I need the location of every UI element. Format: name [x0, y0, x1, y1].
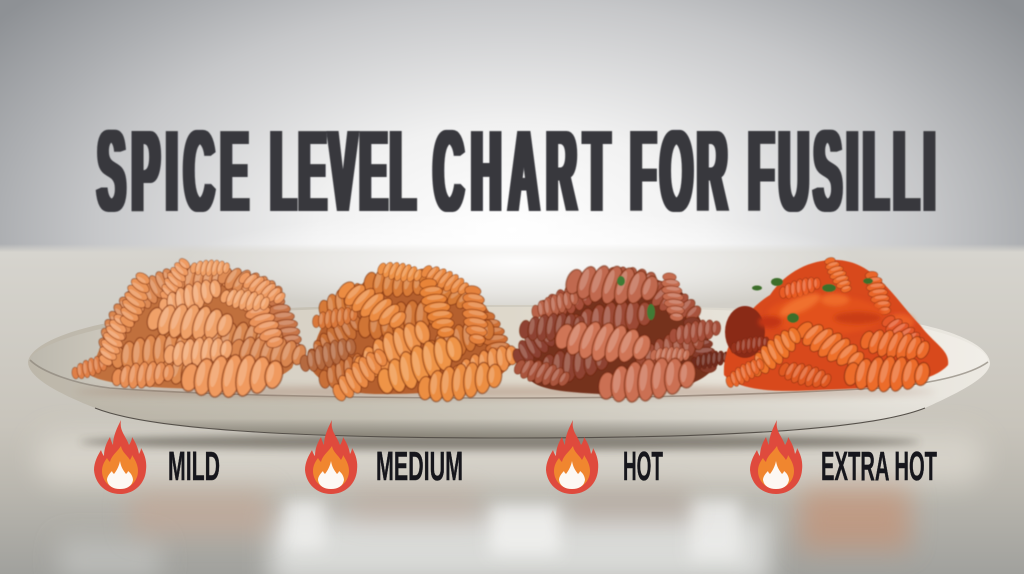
title: FOR: [630, 107, 727, 236]
title: [98, 107, 935, 236]
plate: [28, 305, 990, 450]
pasta pile: hot: [504, 260, 732, 410]
icon: flame extra hot: [750, 420, 802, 494]
icon: flame mild: [94, 420, 146, 494]
table surface: [0, 210, 1024, 574]
pasta pile: medium: [294, 258, 524, 409]
pasta pile: mild: [68, 254, 309, 401]
title: FUSILLI: [748, 107, 935, 236]
parsley garnish: [752, 278, 873, 323]
pasta pile: extra hot: [721, 253, 948, 394]
label: medium: MEDIUM: [376, 443, 463, 489]
parsley garnish: [617, 276, 655, 320]
title: SPICE: [98, 107, 248, 236]
text: HOT: [623, 443, 663, 489]
icon: flame medium: [305, 420, 357, 494]
background wall: [0, 0, 1024, 252]
icon: flame hot: [546, 420, 598, 494]
title: CHART: [433, 107, 609, 236]
label: mild: MILD: [168, 443, 220, 489]
title: LEVEL: [270, 107, 415, 236]
